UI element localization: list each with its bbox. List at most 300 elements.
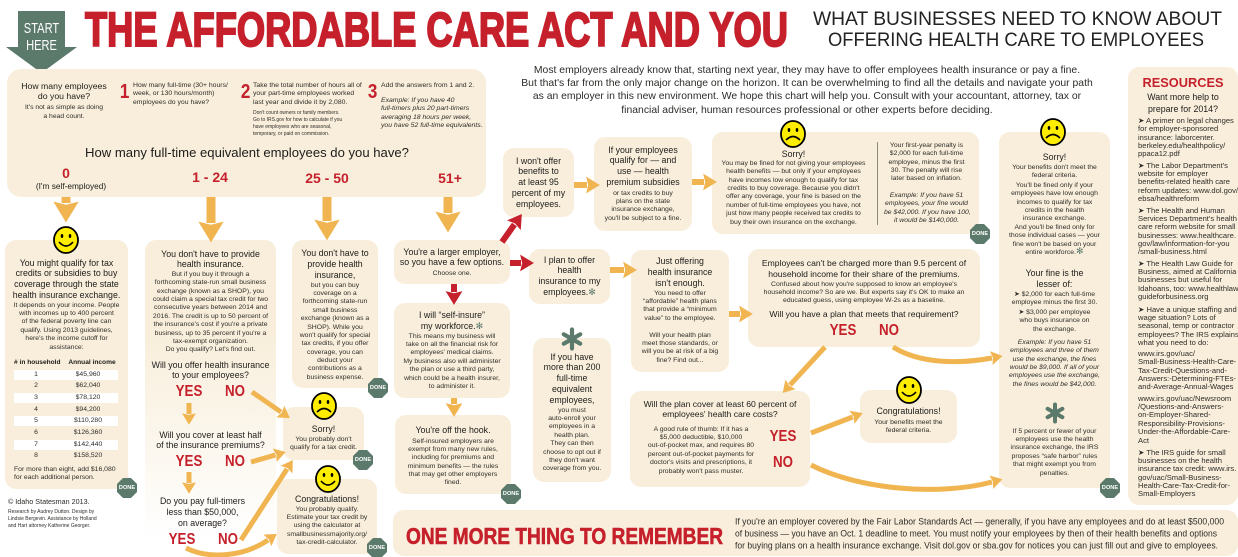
icon: smile benefits meet xyxy=(896,376,922,404)
body text: deduct your xyxy=(317,357,353,364)
text xyxy=(529,255,610,298)
heading xyxy=(631,256,729,289)
resource 7: on-Employer-Shared- xyxy=(1138,410,1211,419)
arrow: no to sorry right lower xyxy=(811,465,992,489)
income table: 6 xyxy=(34,429,38,436)
income table: 2 xyxy=(34,382,38,389)
subtitle: OFFERING HEALTH CARE TO EMPLOYEES xyxy=(828,29,1204,51)
done badge xyxy=(970,224,990,244)
body text: fined. xyxy=(445,479,461,486)
heading: employees, xyxy=(550,395,594,405)
answer no: NO xyxy=(225,383,245,400)
body text: contributions as a xyxy=(308,365,362,372)
body text: insurance exchange, xyxy=(611,206,675,213)
income table: $62,040 xyxy=(76,382,100,389)
credits: and Hart attorney Katherine Georger. xyxy=(8,523,90,529)
body text: SHOP). While you xyxy=(307,324,363,331)
panel: 60 percent xyxy=(630,391,810,487)
safe harbor text: proposes “safe harbor” rules xyxy=(1012,453,1097,460)
step 3 text: Add the answers from 1 and 2. xyxy=(381,82,474,89)
body text: minimum benefits — the rules xyxy=(408,463,498,470)
question: full-time equivalents: How many full-time equivalent employees do you have? xyxy=(85,145,409,160)
arrow: to won't offer xyxy=(502,224,514,242)
step number 2: 2 xyxy=(241,81,250,103)
subheading: prepare for 2014? xyxy=(1148,104,1218,114)
panel: sorry no tax credit xyxy=(283,407,364,460)
arrow: no to sorry 2 xyxy=(251,455,275,462)
heading: I will “self-insure” xyxy=(419,310,485,320)
answer no: NO xyxy=(879,322,899,339)
body text: But if you buy it through a xyxy=(172,271,249,278)
body text: 2016. The credit is up to 50 percent of xyxy=(153,313,268,320)
text: employees. xyxy=(516,199,561,209)
body text: household income? So are we. But experts say it's OK to make an xyxy=(764,289,964,296)
criteria text: Your benefits don't meet the xyxy=(1012,164,1097,171)
resource 3 xyxy=(1138,206,1237,257)
body text: business, up to 35 percent if you're a xyxy=(155,330,266,336)
resource 5: what you need to do: xyxy=(1138,338,1209,347)
body text: qualify for a tax credit. xyxy=(290,444,357,451)
body text: that provide a “minimum xyxy=(643,306,717,313)
body text: number of full-time employees you have, not xyxy=(726,202,861,209)
heading xyxy=(748,258,980,279)
income table: $94,200 xyxy=(76,406,100,413)
body text: tax-credit-calculator. xyxy=(296,539,358,546)
question: offer insurance: to your employees? xyxy=(172,370,249,380)
penalty text xyxy=(888,142,965,182)
heading: You might qualify for tax xyxy=(20,258,113,268)
resource 4: ➤ The Health Law Guide for xyxy=(1138,259,1233,268)
question: pay under 50000 xyxy=(160,496,245,528)
body text: My business also will administer xyxy=(403,358,501,365)
heading: equivalent xyxy=(552,384,592,394)
step 3 example: you have 52 full-time equivalents. xyxy=(381,122,483,129)
body text: percent out-of-pocket payments for xyxy=(648,451,754,458)
body text: you must xyxy=(558,407,586,414)
body text: You need to offer xyxy=(654,290,706,297)
arrow: to plan to offer xyxy=(510,260,521,266)
text: I won't offer xyxy=(516,156,561,166)
answer no: NO xyxy=(218,531,238,548)
heading xyxy=(630,399,810,420)
intro text: Most employers already know that, starting next year, they may have to offer employees health insurance or pay a fine. xyxy=(534,64,1080,76)
step 2 text: last year and divide it by 2,080. xyxy=(253,99,347,106)
resource 1: for employer-sponsored xyxy=(1138,124,1218,133)
body text: Do you qualify? Let's find out. xyxy=(166,346,255,353)
safe harbor text: If 5 percent or fewer of your xyxy=(1013,428,1096,435)
fined text: incomes to qualify for tax xyxy=(1017,199,1092,206)
resource 8: Health-Care-Tax-Credit-for- xyxy=(1138,481,1230,490)
resource 6: www.irs.gov/uac/ xyxy=(1138,349,1195,358)
body text: tax-exempt organization. xyxy=(173,338,248,345)
asterisk: more than 200 xyxy=(560,327,584,351)
panel: congratulations criteria xyxy=(860,390,957,443)
step 3 example: Example: If you have 40 xyxy=(381,97,454,104)
body text: tax credits, if you offer xyxy=(302,340,368,347)
text: health xyxy=(558,265,581,275)
table header xyxy=(14,359,116,366)
resource 6: Answers:-Determining-FTEs- xyxy=(1138,374,1236,383)
fined text: employees have low enough xyxy=(1011,190,1098,197)
heading: qualify for — and xyxy=(610,155,676,165)
fined text: credits in the health xyxy=(1025,207,1084,214)
heading: Sorry! xyxy=(782,149,805,159)
heading: You're a larger employer, xyxy=(403,247,501,257)
heading: isn't enough. xyxy=(655,278,705,288)
income table: $110,280 xyxy=(74,417,102,424)
heading: how many employees: How many employees xyxy=(21,81,107,91)
resource 8: businesses on the health xyxy=(1138,456,1222,465)
body text: They can then xyxy=(550,440,594,447)
income table: 3 xyxy=(34,394,38,401)
body question: will you be at risk of a big xyxy=(642,348,718,355)
body text: Your benefits meet the xyxy=(874,418,943,426)
body text: assistance: xyxy=(49,344,84,351)
resource 5: wage situation? Lots of xyxy=(1138,313,1216,322)
fined text: insurance exchange. xyxy=(1023,215,1086,222)
heading: You don't have to provide xyxy=(161,249,260,259)
question: pay under 50000: Do you pay full-timers xyxy=(160,496,245,506)
intro text: financial adviser, human resources professional or other experts before deciding. xyxy=(621,105,993,116)
heading: RESOURCES xyxy=(1142,75,1224,90)
body text: but you can buy xyxy=(311,282,359,289)
body text xyxy=(860,418,957,435)
body text xyxy=(604,190,681,222)
intro text: as an employer in this new environment. We hope this chart will help you. Consult with your accountant, attorney, tax or xyxy=(533,91,1081,102)
income table: 5 xyxy=(34,417,38,424)
done badge xyxy=(501,484,521,504)
resource 8 xyxy=(1138,448,1236,499)
step 2 text xyxy=(253,82,362,106)
safe harbor text: penalties. xyxy=(1040,470,1069,477)
safe harbor text: insurance exchange, the IRS xyxy=(1011,444,1098,451)
fined text: entire workforce.✻ xyxy=(1025,247,1084,257)
step 2 text: your part-time employees worked xyxy=(253,90,354,97)
resource 7: /Questions-and-Answers- xyxy=(1138,402,1224,411)
body text xyxy=(153,271,268,353)
body text xyxy=(748,280,980,306)
body text: buy their own insurance on the exchange. xyxy=(730,218,857,226)
body text: to administer it. xyxy=(429,383,475,390)
body text: exchange (known as a SHOP), you xyxy=(157,288,264,295)
heading: credits or subsidies to buy xyxy=(16,268,117,278)
note: head count xyxy=(25,104,103,120)
icon: frown right panel xyxy=(1040,118,1066,146)
body text xyxy=(14,302,120,351)
body text: forthcoming state-run xyxy=(303,298,367,305)
resource 2: reform updates: www.dol.gov/ xyxy=(1138,186,1238,195)
fine heading: lesser of: xyxy=(1037,279,1072,289)
body text: A good rule of thumb: If it has a xyxy=(654,426,748,433)
resource 5: ➤ Have a unique staffing and xyxy=(1138,305,1237,314)
resource 3: ➤ The Health and Human xyxy=(1138,206,1225,214)
body text: doctor's visits and prescriptions, it xyxy=(650,459,752,466)
heading: more than 200 xyxy=(544,362,600,372)
body text: exchange (known as a xyxy=(301,315,369,322)
answer yes: YES xyxy=(169,531,195,548)
fined text: You'll be fined only if your xyxy=(1016,182,1093,189)
body text: coverage from you. xyxy=(543,465,601,472)
body text: the plan or use a third party, xyxy=(410,366,494,373)
credits: Research by Audrey Dutton. Design by xyxy=(8,509,94,515)
fine example: use the exchange, the fines xyxy=(1013,356,1096,363)
heading xyxy=(400,247,504,267)
body text xyxy=(631,290,729,323)
body text: You may be fined for not giving your employees xyxy=(722,160,865,167)
body text: Self-insured employers are xyxy=(412,438,494,444)
credits: Lindsie Bergevin. Assistance by Holland xyxy=(8,516,97,522)
credits xyxy=(8,509,97,529)
penalty example: it would be $140,000. xyxy=(894,217,959,224)
resource 6: Small-Business-Health-Care- xyxy=(1138,357,1236,366)
resource 6: Tax-Credit-Questions-and- xyxy=(1138,366,1227,375)
panel: premium subsidies xyxy=(594,137,692,231)
income table: $45,960 xyxy=(76,371,100,378)
resource 2: ebsa/healthreform xyxy=(1138,194,1199,203)
resource 8: Small-Employers xyxy=(1138,489,1195,498)
heading: household income for their share of the premiums. xyxy=(768,269,960,279)
resource 4: businesses but useful for xyxy=(1138,275,1222,284)
text xyxy=(512,156,566,209)
resource 1: ➤ A primer on legal changes xyxy=(1138,116,1234,125)
heading: full-time xyxy=(557,373,587,383)
body text: consecutive years between 2014 and xyxy=(154,304,267,311)
body text: credits to buy coverage. Because you didn't xyxy=(727,185,860,192)
body text: just how many people received tax credits to xyxy=(726,210,861,217)
option: 51+: 51+ xyxy=(438,170,462,186)
arrow: to 9.5 percent xyxy=(729,311,740,317)
subtitle: WHAT BUSINESSES NEED TO KNOW ABOUT xyxy=(813,8,1222,30)
resource 7: Under-the-Affordable-Care- xyxy=(1138,427,1230,436)
subheading xyxy=(1128,91,1238,115)
resource 6 xyxy=(1138,350,1236,392)
resource 4: Idahoans, too: www.healthlaw xyxy=(1138,284,1238,293)
panel: self-insure xyxy=(394,303,510,398)
fined text: fine won't be based on your xyxy=(1013,240,1096,248)
body text: employees in a xyxy=(549,423,595,430)
fine example: employees use the exchange, xyxy=(1009,372,1100,379)
heading: You're off the hook. xyxy=(415,425,491,435)
heading: health insurance. xyxy=(177,259,244,269)
done badge: DONE xyxy=(355,457,371,463)
body text xyxy=(300,282,370,381)
heading: how many employees: do you have? xyxy=(38,91,90,101)
icon: smile congratulations xyxy=(315,465,341,493)
penalty text: employee, minus the first xyxy=(888,159,965,166)
resource 3: Services Department's health xyxy=(1138,214,1237,223)
heading: insurance, xyxy=(315,270,355,280)
resource 4 xyxy=(1138,260,1238,302)
body text: “affordable” health plans xyxy=(643,298,717,305)
panel: off the hook xyxy=(395,415,511,494)
body text: using the calculator at xyxy=(294,522,360,529)
note: head count: It's not as simple as doing xyxy=(25,104,103,111)
heading: health insurance xyxy=(648,267,712,277)
penalty example: be $42,000. If you have 100, xyxy=(884,209,971,216)
resource 3: care reform website for small xyxy=(1138,222,1235,231)
arrow: yes to 60 percent xyxy=(790,347,825,385)
heading xyxy=(606,145,680,187)
step 3 example xyxy=(380,97,483,129)
body text: choose to opt out if xyxy=(543,449,601,456)
body text: including for premiums and xyxy=(412,454,494,461)
step 2 text: Take the total number of hours all of xyxy=(253,82,362,89)
table header: # in household xyxy=(14,359,61,366)
resource 2: benefits-related health care xyxy=(1138,177,1230,186)
criteria text: federal criteria. xyxy=(1032,172,1077,179)
penalty text: later based on inflation. xyxy=(891,175,962,182)
body text: which could be a health insurer, xyxy=(404,375,500,382)
heading: Sorry! xyxy=(312,424,335,434)
body text: small business xyxy=(313,307,357,314)
step 1 text: week, or 130 hours/month) xyxy=(133,90,214,97)
heading: so you have a few options. xyxy=(400,257,504,267)
done badge: DONE xyxy=(369,545,385,551)
body text: Confused about how you're supposed to know an employee's xyxy=(771,280,957,288)
done badge xyxy=(368,378,388,398)
answer yes: YES xyxy=(830,322,856,339)
penalty example: employees, your fine would xyxy=(885,200,968,207)
resource 2: ➤ The Labor Department's xyxy=(1138,160,1228,170)
resource 2 xyxy=(1138,162,1238,203)
panel: how many employees xyxy=(7,69,486,197)
start here arrow: START xyxy=(24,20,59,36)
question: offer insurance xyxy=(152,360,269,380)
fine option 2: who buys insurance on xyxy=(1019,317,1090,324)
question: Will you have a plan that meets that requirement? xyxy=(769,309,959,319)
resource 1: berkeley.edu/healthpolicy/ xyxy=(1138,141,1225,150)
body text: It depends on your income. People xyxy=(14,302,119,309)
heading: how many employees xyxy=(21,81,107,101)
heading: Just offering xyxy=(656,256,704,266)
question: cover premiums: of the insurance premiums? xyxy=(156,440,265,450)
body text: employees' medical claims. xyxy=(410,349,494,356)
body text xyxy=(733,510,1233,556)
body text: could claim a special tax credit for two xyxy=(153,296,268,303)
subtitle xyxy=(813,8,1222,51)
heading xyxy=(533,352,611,406)
body text: take on all the financial risk for xyxy=(406,341,498,348)
resource 1: ppaca12.pdf xyxy=(1138,149,1180,158)
income table: $142,440 xyxy=(74,441,102,448)
penalty example: Example: If you have 51 xyxy=(890,192,963,199)
resource 8: gov/uac/Small-Business- xyxy=(1138,473,1222,482)
step 2 note: Go to IRS.gov for how to calculate if you xyxy=(253,117,342,123)
income table: 7 xyxy=(34,441,38,448)
body text: plans on the state xyxy=(616,198,670,205)
panel: sorry fine xyxy=(712,132,979,234)
heading: Congratulations! xyxy=(295,494,359,504)
step number 1: 1 xyxy=(120,81,129,103)
fine option 2: ➤ $3,000 per employee xyxy=(1019,309,1090,316)
criteria text xyxy=(1012,164,1097,179)
panel: plan to offer xyxy=(529,249,610,304)
arrow: 0 to self-employed xyxy=(62,197,70,203)
note: head count: a head count. xyxy=(43,112,85,120)
fine example: would be $9,000. If all of your xyxy=(1010,364,1099,371)
table footnote: For more than eight, add $16,080 xyxy=(14,466,116,472)
panel: larger employer xyxy=(394,240,510,284)
income table: $158,520 xyxy=(74,452,102,459)
option: 0: 0 xyxy=(62,165,70,181)
safe harbor text xyxy=(999,428,1110,478)
body text: smallbusinessmajority.org/ xyxy=(287,531,367,538)
heading: employees' health care costs? xyxy=(662,409,778,419)
icon: smile self-employed xyxy=(53,226,79,254)
arrow: to just offering xyxy=(610,267,624,273)
arrow: to sorry fine xyxy=(692,179,704,185)
text: at least 95 xyxy=(518,177,559,187)
step number 3: 3 xyxy=(368,81,377,103)
text: benefits to xyxy=(518,166,559,176)
body text: or tax credits to buy xyxy=(613,190,673,196)
panel: 1-24 employees xyxy=(145,240,276,557)
body text xyxy=(287,506,368,546)
option: 1-24: 1 - 24 xyxy=(192,169,228,185)
body text xyxy=(533,407,611,474)
fine example: employees and three of them xyxy=(1010,347,1099,354)
heading: Will the plan cover at least 60 percent of xyxy=(644,399,796,409)
arrow: no to sorry 1 xyxy=(252,392,281,412)
body question: Will your health plan xyxy=(649,332,711,338)
body text: value” to the employee. xyxy=(644,315,716,322)
income table: 1 xyxy=(34,371,38,378)
text: employees.✻ xyxy=(543,287,596,298)
text: insurance to my xyxy=(538,276,601,286)
resource 1 xyxy=(1138,117,1234,159)
resource 7: Act xyxy=(1138,436,1149,445)
heading: health insurance exchange. xyxy=(13,290,120,300)
income table: 8 xyxy=(34,452,38,459)
body text: You probably qualify. xyxy=(296,506,358,513)
resource 7 xyxy=(1138,395,1231,445)
done badge: DONE xyxy=(972,231,988,237)
resource 3: /small-business.html xyxy=(1138,247,1207,256)
body text: you'll be subject to a fine. xyxy=(605,215,681,222)
body question xyxy=(631,332,729,365)
arrow: yes to congratulations right xyxy=(811,417,853,433)
penalty example xyxy=(884,192,971,224)
panel: 25-50 employees xyxy=(292,240,378,388)
text: I plan to offer xyxy=(544,255,595,265)
step 1 text: employees do you have? xyxy=(133,99,209,106)
fine option 2 xyxy=(1019,309,1090,333)
resource 3: businesses: www.healthcare. xyxy=(1138,231,1236,240)
panel: resources xyxy=(1128,67,1238,505)
copyright: © Idaho Statesman 2013. xyxy=(8,497,90,506)
body text: health benefits — but only if your employees xyxy=(726,168,861,175)
table header: Annual income xyxy=(68,359,116,366)
safe harbor text: employees use the health xyxy=(1016,436,1094,443)
heading: If your employees xyxy=(608,145,678,155)
body text: out-of-pocket max, and requires 80 xyxy=(648,442,754,449)
option: 25-50: 25 - 50 xyxy=(305,170,349,186)
panel: self-employed xyxy=(5,240,128,489)
question: pay under 50000: less than $50,000, xyxy=(167,507,238,517)
arrow: to off the hook xyxy=(451,398,457,404)
heading: Congratulations! xyxy=(876,406,941,416)
table footnote: for each additional person. xyxy=(14,474,95,481)
panel: sorry benefits don't meet criteria xyxy=(999,132,1110,488)
arrow: 51+ xyxy=(444,197,452,213)
body text: won't qualify for special xyxy=(300,332,370,339)
heading: Employees can't be charged more than 9.5 percent of xyxy=(762,258,966,268)
body text: that may get other employers xyxy=(409,471,497,478)
arrow: no to sorry 3 xyxy=(241,469,287,540)
heading: provide health xyxy=(307,259,363,269)
income table xyxy=(14,359,118,459)
fine example: Example: If you have 51 xyxy=(1018,339,1091,346)
